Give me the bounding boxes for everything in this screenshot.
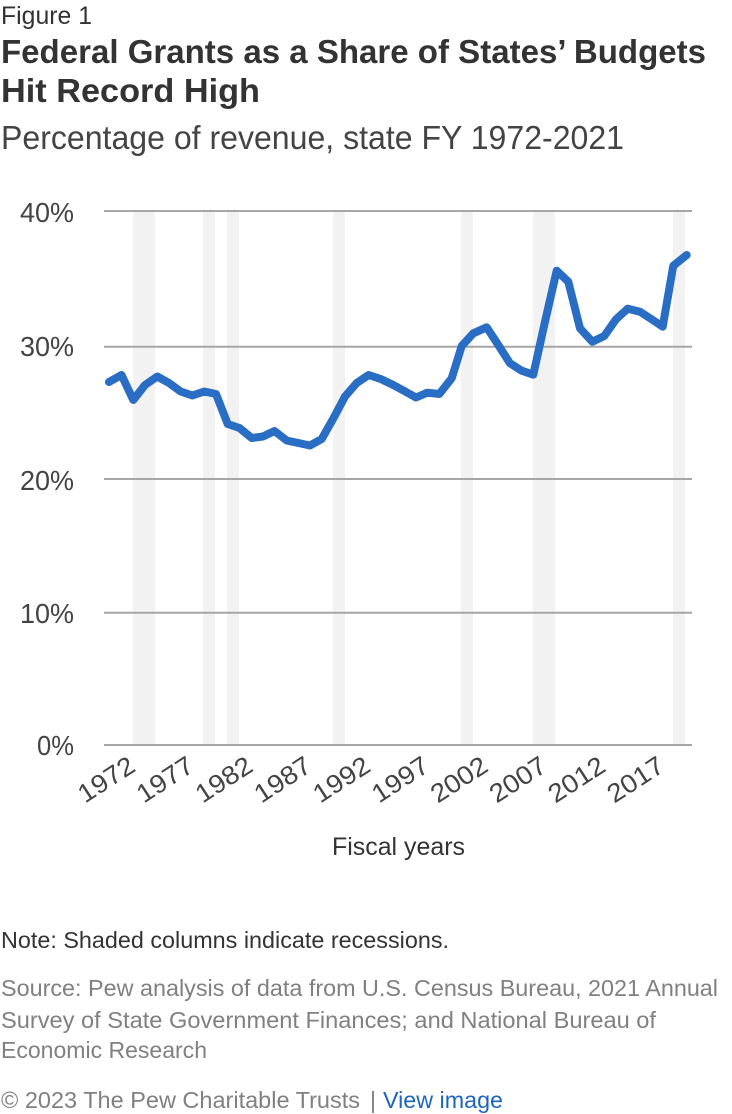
x axis labels: 1977: [131, 750, 199, 809]
x axis labels: 2012: [542, 750, 611, 809]
title: Federal Grants as a Share of States’ Budgets: [1, 33, 706, 70]
y axis labels: 10%: [20, 598, 74, 629]
y axis labels: 30%: [20, 331, 74, 362]
y axis labels: [20, 197, 74, 761]
source: Source: Pew analysis of data from U.S. Census Bureau, 2021 Annual: [1, 975, 718, 1001]
x axis labels: 1997: [366, 750, 434, 809]
x axis labels: 2017: [601, 750, 669, 809]
x axis labels: 1982: [190, 750, 258, 809]
figure label: Figure 1: [1, 2, 92, 30]
footer: |: [370, 1087, 376, 1113]
y axis labels: 0%: [37, 730, 74, 761]
title: Hit Record High: [1, 72, 260, 109]
x axis labels: 1972: [72, 750, 140, 809]
footer: View image: [383, 1087, 503, 1113]
x axis labels: 2002: [425, 750, 493, 809]
title: [1, 33, 706, 109]
x axis labels: [72, 750, 669, 809]
x axis labels: 2007: [484, 750, 552, 809]
source: Survey of State Government Finances; and National Bureau of: [1, 1007, 657, 1033]
note: Note: Shaded columns indicate recessions.: [1, 927, 449, 953]
x axis labels: 1987: [248, 750, 317, 809]
line chart: [20, 197, 692, 861]
subtitle: Percentage of revenue, state FY 1972-2021: [1, 119, 624, 156]
data line: [109, 255, 687, 446]
recession bands: [133, 211, 685, 745]
y axis labels: 40%: [20, 197, 74, 228]
x axis labels: 1992: [307, 750, 375, 809]
source: [1, 975, 718, 1063]
footer: © 2023 The Pew Charitable Trusts: [1, 1087, 360, 1113]
source: Economic Research: [1, 1037, 207, 1063]
x axis title: Fiscal years: [332, 833, 465, 861]
y axis labels: 20%: [20, 465, 74, 496]
